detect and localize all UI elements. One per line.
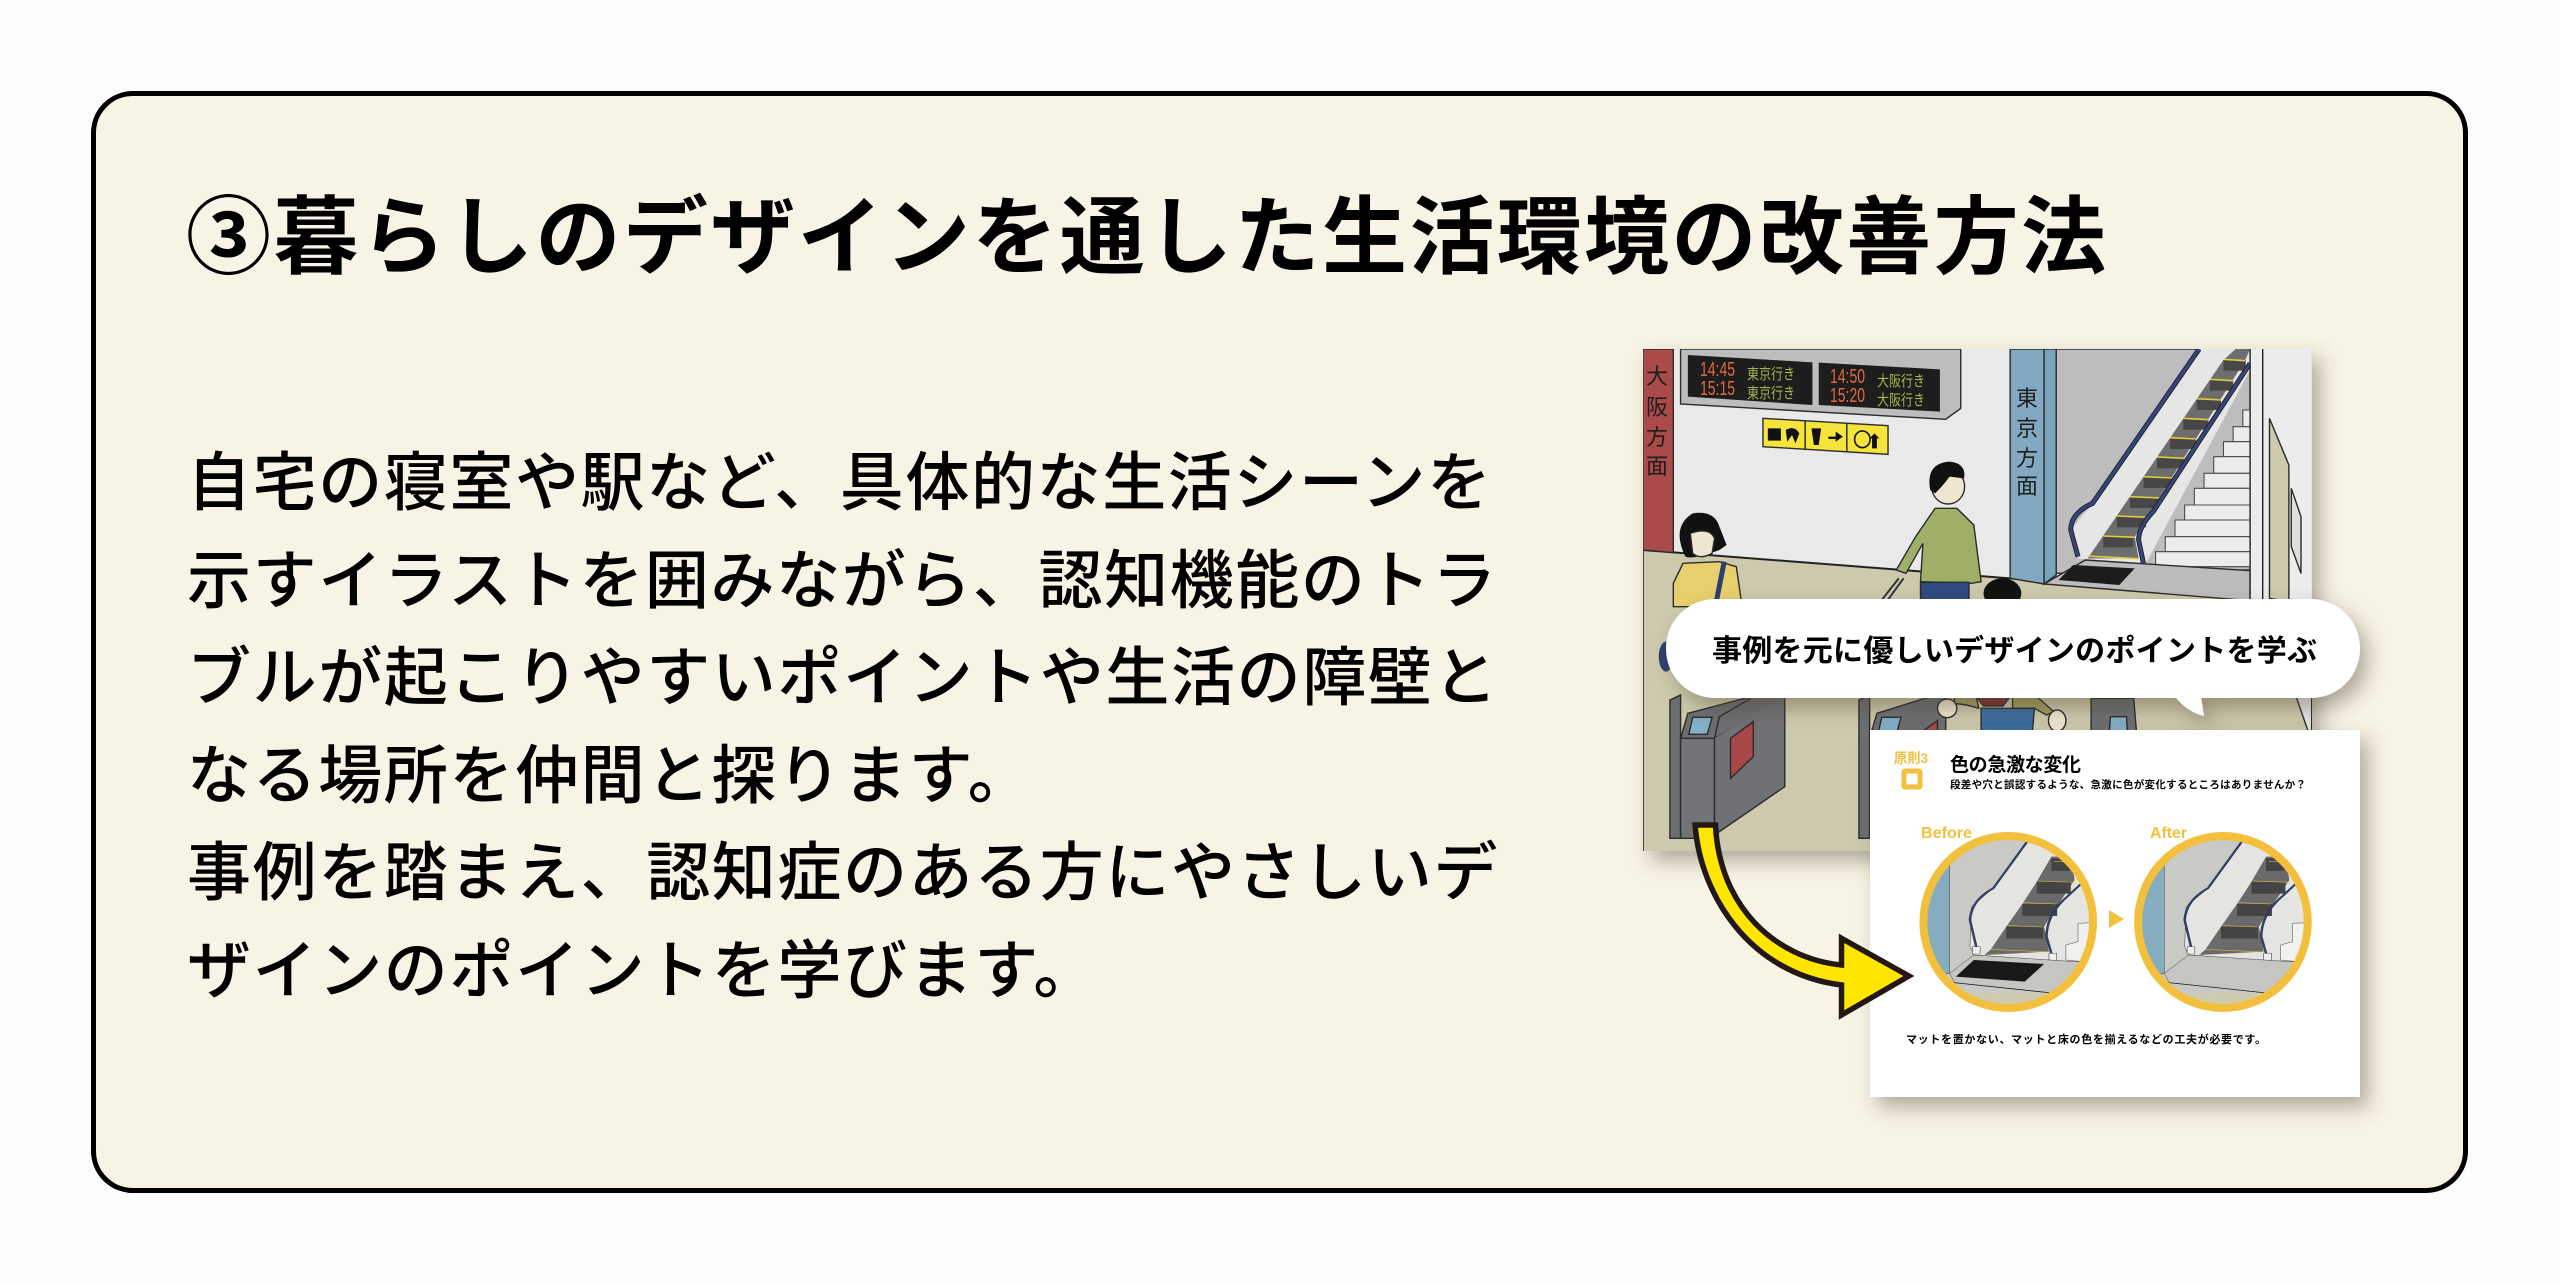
- icon: departure board and direction labels: 15:20: [1830, 385, 1865, 407]
- card heading: 色の急激な変化: [1950, 753, 2081, 776]
- text block: description: 事例を踏まえ、認知症のある方にやさしいデ: [187, 837, 1499, 909]
- icon: departure board and direction labels: 東京行き: [1747, 385, 1795, 402]
- icon: departure board and direction labels: 14:50: [1830, 366, 1865, 388]
- card subheading: 段差や穴と誤認するような、急激に色が変化するところはありませんか？: [1950, 778, 2306, 791]
- icon: departure board and direction labels: 大阪行き: [1877, 392, 1925, 409]
- icon: departure board and direction labels: 15:15: [1700, 378, 1735, 400]
- label: principle number: 原則3: [1894, 750, 1928, 766]
- title: ③暮らしのデザインを通した生活環境の改善方法: [186, 191, 2108, 286]
- icon: departure board and direction labels: 京: [2016, 416, 2038, 441]
- panel: cream rounded card: [91, 91, 2468, 1193]
- icon: departure board and direction labels: [1646, 359, 2038, 499]
- icon: after circle view: [2130, 830, 2315, 1017]
- illustration: passengers and ticket gates: [1659, 462, 2138, 838]
- icon: departure board and direction labels: 東京行き: [1747, 366, 1795, 383]
- panel: design principle card: [1870, 730, 2360, 1097]
- icon: departure board and direction labels: 大: [1646, 364, 1668, 389]
- illustration group: station scene, speech bubble, detail card, arrow: [1638, 346, 2382, 1120]
- text block: description: なる場所を仲間と探ります。: [187, 740, 1033, 812]
- icon: departure board and direction labels: 大阪行き: [1877, 373, 1925, 390]
- text block: description: ザインのポイントを学びます。: [187, 935, 1099, 1007]
- text block: description: 示すイラストを囲みながら、認知機能のトラ: [187, 545, 1498, 617]
- arrow: before to after: [2109, 910, 2124, 928]
- label: after: After: [2150, 825, 2187, 842]
- icon: departure board and direction labels: 方: [1646, 425, 1668, 450]
- callout: speech bubble: [1666, 599, 2360, 716]
- callout: speech bubble: 事例を元に優しいデザインのポイントを学ぶ: [1712, 634, 2317, 668]
- icon: departure board and direction labels: 方: [2016, 446, 2038, 471]
- icon: departure board and direction labels: 14:45: [1700, 359, 1735, 381]
- card caption: マットを置かない、マットと床の色を揃えるなどの工夫が必要です。: [1906, 1032, 2266, 1046]
- label: before: Before: [1921, 825, 1972, 842]
- icon: departure board and direction labels: 東: [2016, 386, 2038, 411]
- text block: description: ブルが起こりやすいポイントや生活の障壁と: [187, 642, 1499, 714]
- icon: departure board and direction labels: 面: [2016, 474, 2038, 499]
- icon: departure board and direction labels: 面: [1646, 454, 1668, 479]
- illustration: station scene: [1643, 349, 2312, 853]
- icon: before circle view: [1916, 830, 2100, 1017]
- icon: departure board and direction labels: 阪: [1646, 395, 1668, 420]
- arrow: curved yellow arrow from scene to card: [1695, 825, 1909, 1015]
- text block: description: [187, 447, 1499, 1007]
- icon: square frame: [1904, 771, 1920, 787]
- text block: description: 自宅の寝室や駅など、具体的な生活シーンを: [187, 447, 1493, 519]
